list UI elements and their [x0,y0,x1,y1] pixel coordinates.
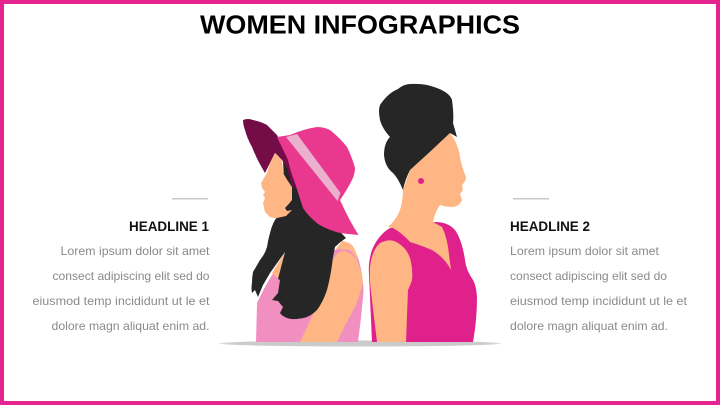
body text [32,244,210,333]
hat brim underside [243,119,296,188]
hat band [286,134,340,201]
headline 1: HEADLINE 1 [129,219,209,234]
arm [370,240,412,342]
shoulder [336,241,358,260]
arm [300,251,363,342]
skin gap in hair [272,252,285,279]
right text block [510,198,688,333]
ground shadow [219,340,501,346]
body text: dolore magn aliquat enim ad. [52,319,210,333]
dress [256,247,364,342]
body text: Lorem ipsum dolor sit amet [510,244,660,258]
headline 2: HEADLINE 2 [510,219,590,234]
long hair [252,160,346,319]
divider [172,198,208,200]
body text [510,244,688,333]
left text block [32,198,210,333]
body text: consect adipiscing elit sed do [510,269,667,283]
neck and face [388,133,466,270]
body text: dolore magn aliquat enim ad. [510,319,668,333]
illustration: woman with hair bun [369,84,477,342]
title: WOMEN INFOGRAPHICS [200,12,520,40]
body text: consect adipiscing elit sed do [52,269,210,283]
dress [369,222,477,342]
face and neck [261,153,292,218]
body text: eiusmod temp incididunt ut le et [510,294,688,308]
earring [418,178,424,184]
hat crown and brim [277,127,358,235]
divider [513,198,549,200]
bun hair [379,84,457,190]
body text: eiusmod temp incididunt ut le et [32,294,210,308]
body text: Lorem ipsum dolor sit amet [60,244,210,258]
illustration: woman with hat [243,119,364,342]
